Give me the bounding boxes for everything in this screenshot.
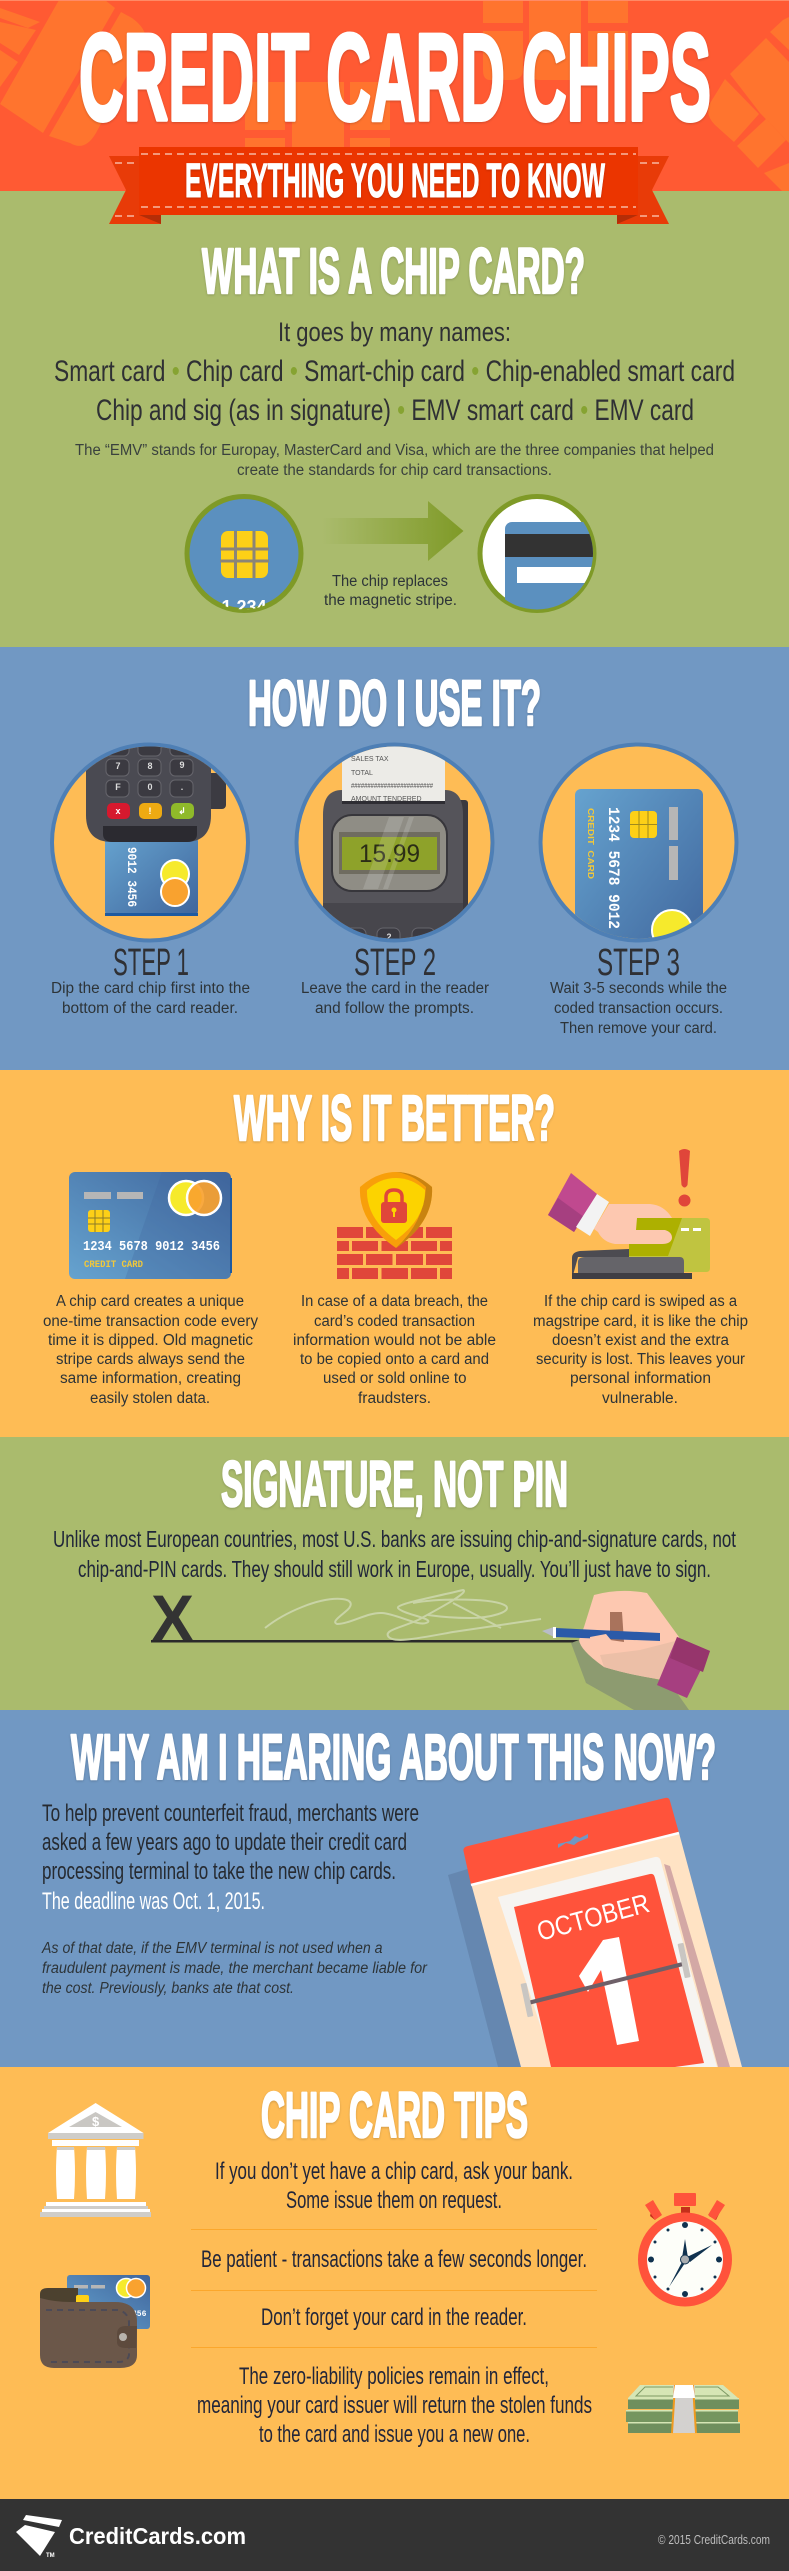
text: liability note: the cost. Previously, banks ate that cost. <box>42 1980 294 1997</box>
icon: step 1 card reader: 9 <box>179 760 185 770</box>
text: names list: Chip and sig (as in signature) • EMV smart card • EMV card <box>96 394 694 427</box>
icon: step 1 card reader: 8 <box>147 761 153 771</box>
icon: step 2 card reader with receipt: ######################### <box>351 783 433 790</box>
text: tip zero liability <box>197 2363 592 2448</box>
icon: credit card front <box>69 1172 231 1279</box>
icon: step 1 card reader: ↲ <box>178 806 186 816</box>
text: tip ask bank: Some issue them on request. <box>286 2187 502 2214</box>
text: step 2 label and description: STEP 2 <box>354 942 436 984</box>
text: swipe warning: security is lost. This leaves your <box>536 1351 745 1368</box>
text: deadline explanation: To help prevent counterfeit fraud, merchants were <box>42 1800 419 1827</box>
text: data breach benefit: to be copied onto a card and <box>300 1351 489 1368</box>
text: tip zero liability: The zero-liability policies remain in effect, <box>239 2363 549 2390</box>
icon: october 1 calendar: OCTOBER <box>534 1888 653 1947</box>
text: chip card benefit: time it is dipped. Old magnetic <box>48 1332 253 1349</box>
text: tip zero liability: to the card and issue you a new one. <box>259 2421 530 2448</box>
icon: creditcards.com logo <box>16 2515 62 2559</box>
text: tip ask bank <box>215 2158 573 2214</box>
icon: october 1 calendar <box>448 1798 742 2067</box>
text: deadline explanation <box>42 1800 419 1915</box>
text: creditcards.com brand: CreditCards.com <box>69 2523 246 2549</box>
icon: step 1 card reader <box>52 740 248 940</box>
heading: chip card tips: CHIP CARD TIPS <box>261 2079 528 2151</box>
icon: step 3 credit card in circle <box>540 744 736 959</box>
text: chip card benefit: stripe cards always send the <box>56 1351 245 1368</box>
text: data breach benefit: information would not be able <box>293 1332 496 1349</box>
text: data breach benefit: used or sold online to <box>323 1370 466 1387</box>
icon: wallet with card: 456 <box>132 2310 147 2319</box>
text: swipe warning: personal information <box>570 1370 711 1387</box>
icon: step 3 credit card in circle: CREDIT CARD <box>586 808 595 879</box>
text: arrow caption: the magnetic stripe. <box>324 592 457 609</box>
text: step 1 label and description: STEP 1 <box>113 942 189 984</box>
text: swipe warning: magstripe card, it is like the chip <box>533 1313 748 1330</box>
icon: chip on card circle: 1 234 <box>221 597 267 617</box>
text: tip ask bank: If you don’t yet have a chip card, ask your bank. <box>215 2158 573 2185</box>
text: deadline explanation: asked a few years ago to update their credit card <box>42 1829 407 1856</box>
text: names list <box>54 355 735 427</box>
text: step 3 label and description: coded transaction occurs. <box>554 1000 723 1017</box>
text: step 3 label and description: STEP 3 <box>597 942 680 984</box>
text: chip card benefit: same information, creating <box>60 1370 241 1387</box>
icon: step 1 card reader: x <box>115 806 121 816</box>
text: step 3 label and description: Wait 3-5 seconds while the <box>550 980 727 997</box>
panel: how do i use it <box>0 647 789 1070</box>
icon: step 1 card reader: 9012 3456 <box>124 847 139 907</box>
icon: bank building <box>40 2103 151 2217</box>
ribbon: subtitle banner <box>109 147 669 224</box>
text: tip be patient: Be patient - transactions take a few seconds longer. <box>201 2246 587 2273</box>
icon: step 2 card reader with receipt: 15.99 <box>359 840 420 868</box>
icon: step 1 card reader: ! <box>148 806 152 816</box>
icon: shield and brick wall <box>337 1172 452 1279</box>
text: swipe warning: If the chip card is swiped as a <box>544 1293 737 1310</box>
panel: header <box>0 0 789 191</box>
text: chip card benefit <box>43 1293 258 1407</box>
panel: signature not pin <box>0 1437 789 1710</box>
icon: step 2 card reader with receipt: 2 <box>386 932 392 942</box>
text: data breach benefit: card’s coded transaction <box>314 1313 475 1330</box>
icon: step 2 card reader with receipt: AMOUNT TENDERED <box>351 796 422 803</box>
text: tip don't forget card: Don’t forget your card in the reader. <box>261 2304 527 2331</box>
icon: hand holding pen <box>542 1591 710 1710</box>
text: tip zero liability: meaning your card issuer will return the stolen funds <box>197 2392 592 2419</box>
text: liability note: As of that date, if the EMV terminal is not used when a <box>41 1940 383 1957</box>
text: step 1 label and description <box>51 942 250 1017</box>
icon: step 1 card reader: 0 <box>147 782 153 792</box>
icon: step 1 card reader: F <box>115 782 121 792</box>
text: emv explanation <box>75 442 714 479</box>
text: emv explanation: create the standards for chip card transactions. <box>237 462 552 479</box>
text: signature explanation <box>53 1526 736 1582</box>
text: chip card benefit: A chip card creates a unique <box>56 1293 244 1310</box>
text: swipe warning: doesn’t exist and the extra <box>552 1332 729 1349</box>
icon: credit card front: 1234 5678 9012 3456 <box>83 1239 220 1255</box>
icon: step 2 card reader with receipt <box>296 740 492 948</box>
arrow: chip replaces stripe <box>322 501 464 561</box>
text: liability note <box>41 1940 428 1997</box>
text: liability note: fraudulent payment is made, the merchant became liable for <box>42 1960 428 1977</box>
icon: signature line with x: X <box>151 1581 194 1655</box>
panel: why is it better <box>0 1070 789 1437</box>
icon: step 2 card reader with receipt: TOTAL <box>351 770 373 777</box>
text: step 1 label and description: Dip the card chip first into the <box>51 980 250 997</box>
text: deadline explanation: The deadline was Oct. 1, 2015. <box>42 1888 265 1915</box>
text: step 1 label and description: bottom of the card reader. <box>62 1000 238 1017</box>
icon: signature line with x <box>151 1581 579 1655</box>
icon: step 1 card reader: 7 <box>115 761 121 771</box>
text: step 2 label and description <box>301 942 489 1017</box>
icon: step 1 card reader: . <box>181 782 183 792</box>
text: step 2 label and description: Leave the card in the reader <box>301 980 489 997</box>
text: step 2 label and description: and follow the prompts. <box>315 1000 474 1017</box>
text: deadline explanation: processing terminal to take the new chip cards. <box>42 1858 396 1885</box>
text: swipe warning <box>533 1293 748 1407</box>
panel: footer <box>0 2499 789 2571</box>
text: emv explanation: The “EMV” stands for Europay, MasterCard and Visa, which are the three companies that helped <box>75 442 714 459</box>
icon: chip on card circle <box>187 496 301 617</box>
text: step 3 label and description: Then remove your card. <box>560 1020 717 1037</box>
panel: why am i hearing about this now <box>0 1710 789 2067</box>
text: many names intro: It goes by many names: <box>278 317 511 347</box>
icon: magnetic stripe card circle <box>478 494 596 613</box>
text: chip card benefit: one-time transaction code every <box>43 1313 258 1330</box>
text: data breach benefit: fraudsters. <box>358 1390 431 1407</box>
icon: wallet with card <box>40 2275 150 2368</box>
icon: step 2 card reader with receipt: SALES TAX <box>351 756 389 763</box>
icon: stopwatch <box>638 2193 732 2306</box>
panel: chip card tips <box>0 2067 789 2499</box>
text: chip card benefit: easily stolen data. <box>90 1390 210 1407</box>
icon: stack of money <box>626 2385 740 2433</box>
text: data breach benefit <box>293 1293 496 1407</box>
icon: bank building: $ <box>92 2114 100 2129</box>
icon: creditcards.com logo: TM <box>46 2553 55 2559</box>
panel: what is a chip card <box>0 191 789 647</box>
text: arrow caption: The chip replaces <box>332 573 448 590</box>
text: arrow caption <box>324 573 457 609</box>
icon: step 3 credit card in circle: 1234 5678 9012 <box>604 807 622 929</box>
icon: credit card front: CREDIT CARD <box>84 1260 143 1271</box>
text: data breach benefit: In case of a data breach, the <box>301 1293 488 1310</box>
icon: hand swiping card with warning <box>548 1149 710 1279</box>
text: swipe warning: vulnerable. <box>602 1390 678 1407</box>
text: step 3 label and description <box>550 942 727 1037</box>
